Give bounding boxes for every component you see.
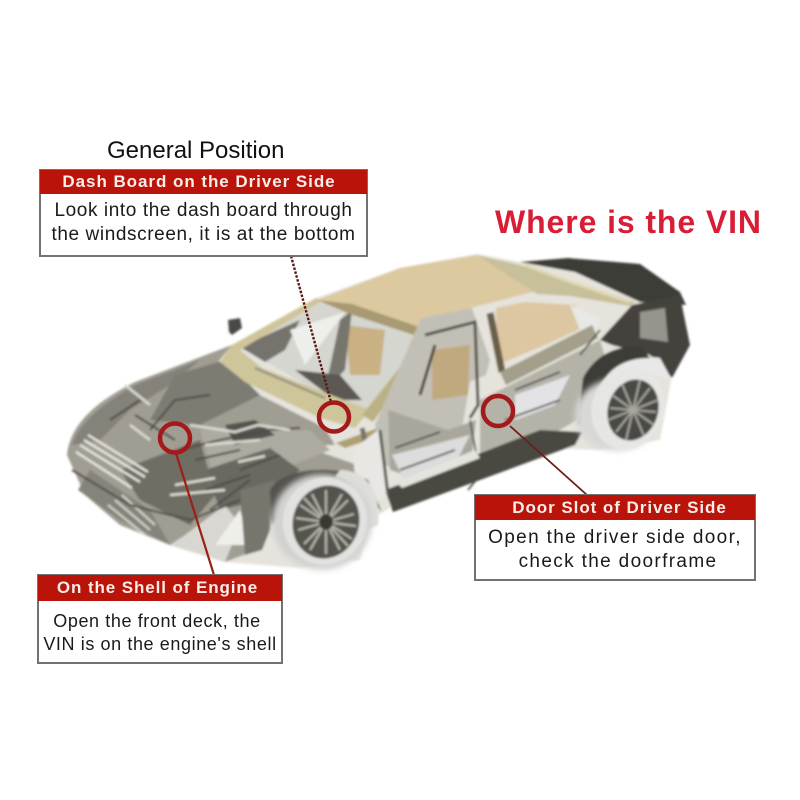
callout text [51, 200, 356, 244]
mirror [228, 318, 242, 335]
callout text [43, 611, 277, 654]
callout heading: Dash Board on the Driver Side [62, 172, 336, 191]
callout heading [475, 495, 755, 520]
rear trunk in dark [520, 258, 686, 305]
callout heading [40, 170, 367, 194]
rocker sill [385, 430, 582, 512]
callout heading: Door Slot of Driver Side [512, 498, 727, 517]
rear wheel [575, 357, 675, 459]
callout text: Open the front deck, the [53, 611, 261, 631]
callout text: VIN is on the engine's shell [43, 634, 277, 654]
callout: dash board [39, 169, 368, 257]
callout text: the windscreen, it is at the bottom [51, 224, 356, 244]
rear door opening with tan interior [496, 302, 582, 365]
cowl and A-pillar frame [220, 298, 434, 470]
marker: engine circle and leader [160, 424, 214, 575]
heading: General Position: General Position [107, 137, 284, 164]
door sill and seats [388, 410, 476, 480]
callout heading [38, 575, 282, 601]
hood and engine bay [67, 345, 372, 562]
title: Where is the VIN: Where is the VIN [495, 204, 762, 240]
front pillar lower [352, 430, 388, 503]
front arch shadow [270, 470, 382, 525]
marker: dash board circle and dotted leader [291, 256, 349, 432]
marker: door slot circle and leader [483, 396, 587, 495]
callout text: Open the driver side door, [488, 527, 742, 548]
callout: door slot [474, 494, 756, 581]
callout text: Look into the dash board through [54, 200, 353, 221]
rear arch [585, 357, 672, 420]
roof panel [317, 255, 537, 335]
car body base [67, 254, 690, 568]
front grille slats [76, 435, 148, 488]
callout heading: On the Shell of Engine [57, 578, 258, 597]
callout text: check the doorframe [519, 550, 717, 572]
front wheel [270, 465, 380, 577]
windscreen opening and interior [238, 302, 424, 415]
callout: engine shell [37, 574, 283, 664]
callout text [488, 527, 742, 572]
